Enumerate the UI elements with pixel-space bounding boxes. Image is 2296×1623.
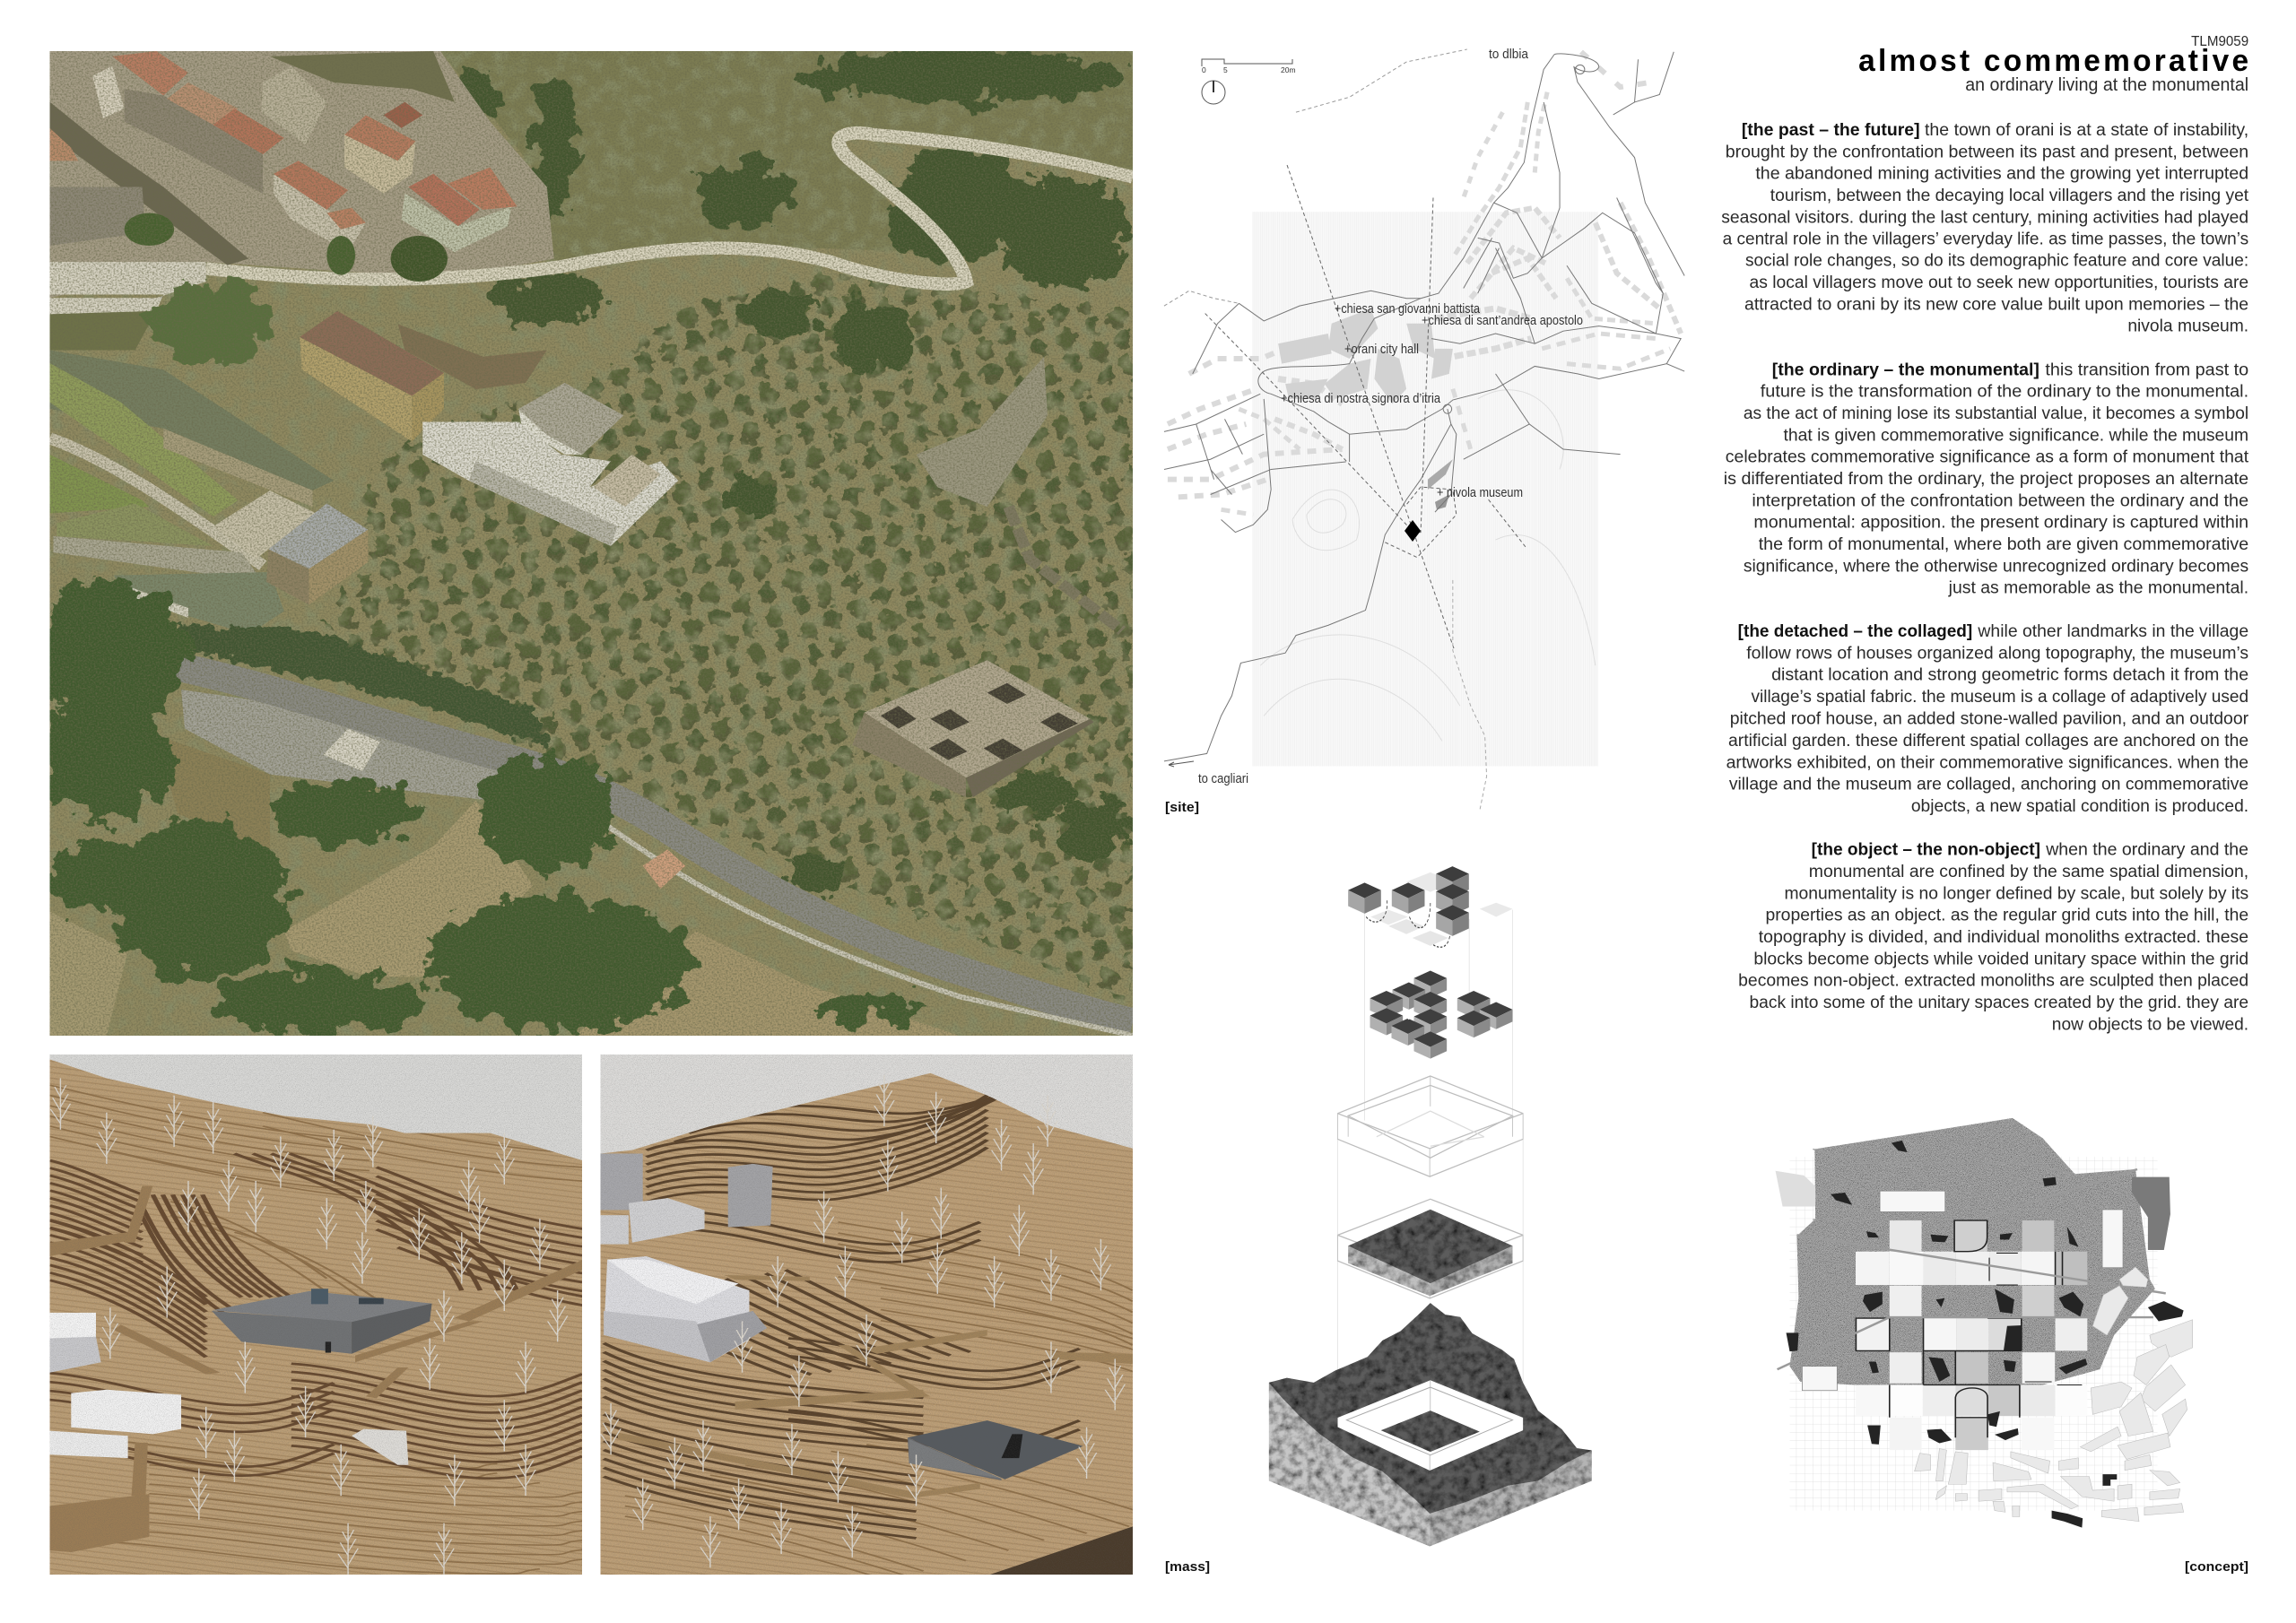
text block: the object the non-object: topography is divided, and individual monoliths extracted. these <box>1759 927 2248 946</box>
text block: the past the future: social role changes, so do its demographic feature and core value: <box>1745 251 2248 270</box>
text block: the past the future: seasonal visitors. during the last century, mining activities had played <box>1721 207 2248 226</box>
sky backdrop <box>596 1051 1165 1584</box>
projection guide lines <box>1337 910 1523 1420</box>
black rock monolith cut-outs <box>1787 1141 2184 1528</box>
cagliari direction arrow <box>1169 761 1194 767</box>
contour stripes faint <box>50 1085 582 1574</box>
left lawn terraces and gardens <box>50 311 334 634</box>
project code: TLM9059 <box>2191 34 2248 49</box>
cliff rock <box>917 357 1048 507</box>
plan collage cells <box>1856 1220 2087 1450</box>
hillside ground <box>50 51 1133 1036</box>
hillside road <box>206 133 1133 284</box>
model grain <box>596 1051 1165 1584</box>
road network <box>1164 52 1684 761</box>
text block: the object the non-object: blocks become objects while voided unitary space within the grid <box>1753 949 2248 968</box>
photo: terrain model view two <box>596 1051 1176 1592</box>
large tree masses <box>36 578 923 1036</box>
map labels: + nivola museum <box>1437 485 1523 500</box>
text block: the ordinary the monumental: interpretation of the confrontation between the ordinary and the <box>1752 490 2248 509</box>
white sheds <box>1802 1191 2123 1391</box>
village houses <box>50 51 517 282</box>
text block: the detached the collaged: while other landmarks in the village <box>1977 621 2248 640</box>
courtyard behind the house <box>398 324 547 389</box>
forecourt <box>181 690 518 801</box>
cell walls <box>1856 1220 2082 1437</box>
lower field <box>284 801 533 976</box>
village building footprints <box>1168 52 1681 515</box>
map labels: to dlbia <box>1489 47 1529 62</box>
brown slope at left <box>156 735 270 853</box>
map labels: 0 <box>1202 65 1206 74</box>
text block: the object the non-object: now objects to be viewed. <box>2052 1014 2248 1033</box>
retaining wall <box>1008 507 1122 630</box>
dark tree clusters <box>455 50 1129 892</box>
retaining walls <box>50 1186 582 1552</box>
village ground <box>50 51 554 298</box>
text block: the object the non-object: back into some of the unitary spaces created by the grid. they are <box>1749 993 2248 1011</box>
text block: the ordinary the monumental: monumental: apposition. the present ordinary is captured within <box>1753 513 2248 532</box>
text block: the detached the collaged: follow rows of houses organized along topography, the museum’s <box>1746 643 2248 662</box>
text block: the object the non-object: properties as an object. as the regular grid cuts into the hill, the <box>1765 906 2248 924</box>
text block: the detached the collaged: village and the museum are collaged, anchoring on commemorative <box>1729 775 2248 794</box>
text block: the past the future: attracted to orani by its new core value built upon memories – the <box>1744 294 2248 313</box>
terrain block with square void <box>1269 1303 1592 1547</box>
upper garden trees <box>149 282 270 367</box>
cut earth slab inside wireframe <box>1337 1199 1523 1298</box>
site caption: [site] <box>1165 800 1199 815</box>
concrete grid museum on the hill <box>852 660 1093 797</box>
roadside trees band <box>178 624 551 749</box>
map labels <box>1198 47 1583 786</box>
text block: the detached the collaged: village’s spatial fabric. the museum is a collage of adaptively used <box>1751 687 2248 706</box>
text block: the past the future: nivola museum. <box>2127 317 2248 335</box>
upper scrub hillside <box>440 51 1133 262</box>
bare model trees <box>601 1075 1125 1567</box>
asphalt road <box>178 667 1133 1022</box>
exploded mass diagram <box>1269 866 1592 1547</box>
contour stripes <box>36 1051 604 1584</box>
dark concrete museum model <box>212 1289 432 1354</box>
site plan map <box>1164 47 1684 812</box>
old pitched roof house <box>300 311 444 441</box>
retaining walls <box>618 1275 1133 1499</box>
text block: the past the future: tourism, between the decaying local villagers and the rising yet <box>1770 186 2249 204</box>
right hand village grey block <box>2132 1177 2170 1250</box>
concept caption: [concept] <box>2185 1559 2248 1575</box>
text block: the past the future: the abandoned mining activities and the growing yet interrupted <box>1755 164 2248 183</box>
bare model trees <box>50 1079 568 1575</box>
text block: the ordinary the monumental: as the act of mining lose its substantial value, it becomes a symbol <box>1744 404 2248 422</box>
text block: the ordinary the monumental: significance, where the otherwise unrecognized ordinary becomes <box>1744 556 2248 575</box>
road edge line <box>604 823 1133 1036</box>
text block: the object the non-object: becomes non-object. extracted monoliths are sculpted then placed <box>1738 971 2248 990</box>
text block: the ordinary the monumental: that is given commemorative significance. while the museum <box>1784 425 2248 444</box>
text block: the object the non-object: when the ordinary and the <box>2045 840 2248 859</box>
white museum extension model <box>604 1256 767 1362</box>
fine photo grain <box>36 37 1172 1081</box>
faded block at left <box>1776 1171 1815 1207</box>
text block: the ordinary the monumental: future is the transformation of the ordinary to the monumental. <box>1761 382 2248 401</box>
hill path and sightlines dashed <box>1164 49 1526 812</box>
site marker: nivola museum block <box>1405 520 1421 542</box>
text block: the object the non-object: [the object – the non-object] <box>1812 840 2040 859</box>
text block: the past the future: as local villagers move out to seek new opportunities, tourists are <box>1749 273 2248 291</box>
village building footprints <box>1915 1267 2193 1522</box>
concept collage plan <box>1776 1118 2193 1528</box>
vegetation mottling <box>57 51 1133 1035</box>
map labels: +orani city hall <box>1344 342 1419 357</box>
text block: the ordinary the monumental: [the ordinary – the monumental] <box>1772 360 2039 378</box>
map labels: 5 <box>1223 65 1228 74</box>
text block: the ordinary the monumental: celebrates commemorative significance as a form of monument that <box>1726 447 2249 466</box>
north arrow <box>1202 81 1225 104</box>
sky backdrop <box>36 1051 604 1584</box>
text block: the object the non-object: monumental are confined by the same spatial dimension, <box>1809 862 2248 881</box>
text block: the ordinary the monumental: is differentiated from the ordinary, the project proposes an alternate <box>1724 469 2248 488</box>
small roadside house <box>643 849 685 889</box>
contour stripes dark <box>604 1061 1080 1538</box>
map labels: +chiesa san giovanni battista <box>1335 301 1481 317</box>
text block: the ordinary the monumental <box>1724 360 2249 597</box>
title: almost commemorative <box>1858 44 2248 78</box>
contour stripes dark <box>43 1153 604 1479</box>
text block: the detached the collaged: pitched roof house, an added stone-walled pavilion, and an outdoor <box>1730 709 2248 728</box>
fine terrace lines <box>596 1051 1165 1584</box>
contour stripes faint <box>625 1222 1176 1592</box>
text block: the detached the collaged <box>1726 621 2248 815</box>
white concrete museum extension <box>422 383 678 546</box>
text block: the ordinary the monumental: this transition from past to <box>2045 360 2248 378</box>
field bottom right <box>575 931 959 1036</box>
text block: the ordinary the monumental: just as memorable as the monumental. <box>1948 578 2248 597</box>
text block: the past the future: a central role in the villagers’ everyday life. as time passes, the town’s <box>1723 230 2248 248</box>
upper grey blocks <box>600 1153 773 1245</box>
text block: the past the future: [the past – the future] <box>1742 120 1920 139</box>
dark museum model <box>908 1420 1083 1480</box>
contour stripes <box>596 1051 1176 1592</box>
text block: the detached the collaged: artificial garden. these different spatial collages are anchored on the <box>1728 731 2248 750</box>
map labels: to cagliari <box>1198 771 1248 786</box>
text block: the detached the collaged: distant location and strong geometric forms detach it from the <box>1771 665 2248 684</box>
photo: aerial view of the hillside site <box>50 51 1133 1036</box>
text block: the object the non-object: monumentality is no longer defined by scale, but solely by its <box>1784 883 2248 902</box>
second row grid blocks <box>1370 970 1512 1059</box>
text block: the past the future: the town of orani is at a state of instability, <box>1925 120 2248 139</box>
photo: terrain model view one <box>36 1051 604 1584</box>
floor grid and monolith extraction arrows <box>1366 872 1512 947</box>
text block: the ordinary the monumental: the form of monumental, where both are given commemorative <box>1759 534 2248 553</box>
subtitle: an ordinary living at the monumental <box>1965 75 2248 95</box>
fine terrace lines <box>36 1051 604 1584</box>
village wall <box>50 262 206 317</box>
contour field behind the map <box>1252 212 1598 766</box>
white villa blocks <box>50 1313 408 1465</box>
text block: the detached the collaged: [the detached – the collaged] <box>1738 621 1972 640</box>
text block: the object the non-object <box>1738 840 2248 1033</box>
map labels: +chiesa di nostra signora d’itria <box>1281 391 1441 406</box>
stone walled pavilion <box>266 504 368 604</box>
text block: the detached the collaged: artworks exhibited, on their commemorative significances. when the <box>1726 752 2248 771</box>
roadside shed <box>323 729 380 771</box>
map labels: +chiesa di sant’andrea apostolo <box>1422 313 1583 328</box>
model grain <box>36 1051 604 1584</box>
scale bar <box>1202 59 1292 66</box>
textured ground <box>1790 1118 2155 1384</box>
text block: the past the future: brought by the confrontation between its past and present, between <box>1726 142 2248 161</box>
mass caption: [mass] <box>1165 1559 1210 1575</box>
dark ground corner <box>980 1526 1133 1578</box>
text block: the detached the collaged: objects, a new spatial condition is produced. <box>1911 796 2248 815</box>
base grid <box>1790 1157 2158 1511</box>
terrain surface <box>600 1073 1133 1578</box>
olive grove <box>319 272 1133 1002</box>
bottom left bare ground <box>50 912 128 1036</box>
top row monoliths <box>1348 866 1469 936</box>
map labels: 20m <box>1281 65 1296 74</box>
terrain surface <box>50 1060 582 1578</box>
text block: the past the future <box>1721 120 2249 335</box>
dense town centre <box>1278 308 1453 509</box>
grey drainage axis lines <box>1778 1150 2166 1369</box>
wireframe grid box <box>1337 1076 1523 1176</box>
